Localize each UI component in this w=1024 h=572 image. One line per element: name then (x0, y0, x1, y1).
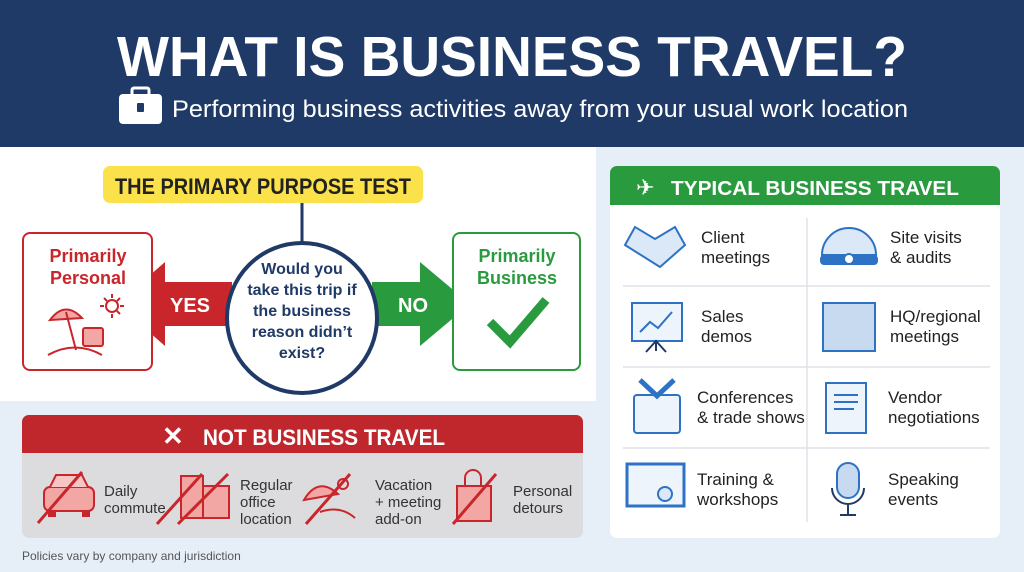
arrow: yes: YES (170, 295, 210, 317)
item: sales demos: Sales (701, 307, 744, 326)
item: training: workshops (696, 490, 778, 509)
subtitle: Performing business activities away from your usual work location (172, 96, 908, 123)
heading: primary purpose test: THE PRIMARY PURPOSE TEST (115, 174, 411, 199)
item: conferences: & trade shows (697, 408, 805, 427)
item: vacation add-on: Vacation (375, 477, 432, 494)
item: sales demos (632, 303, 752, 352)
item: regular office (157, 474, 293, 528)
question circle: exist? (279, 345, 325, 362)
item: vacation add-on: + meeting (375, 494, 441, 511)
item: personal detours (453, 470, 572, 524)
box: primarily business: Primarily (478, 246, 556, 266)
panel: not business travel (22, 415, 583, 538)
item: site visits: & audits (890, 248, 951, 267)
item: training (627, 464, 778, 509)
item: regular office: Regular (240, 477, 293, 494)
footnote: Policies vary by company and jurisdiction (22, 549, 241, 563)
item: vendor negotiations (826, 383, 980, 433)
header banner (0, 0, 1024, 147)
item: site visits (820, 228, 962, 267)
item: conferences (634, 380, 805, 433)
title: WHAT IS BUSINESS TRAVEL? (117, 25, 907, 89)
item: speaking events: Speaking (888, 470, 959, 489)
item: client meetings: meetings (701, 248, 770, 267)
item: hq meetings (823, 303, 981, 351)
box: primarily business: Business (477, 268, 557, 288)
item: sales demos: demos (701, 327, 752, 346)
question circle: reason didn’t (252, 324, 353, 341)
item: vendor negotiations: Vendor (888, 388, 942, 407)
heading: typical business travel: TYPICAL BUSINESS TRAVEL (671, 178, 959, 200)
item: client meetings (625, 227, 770, 267)
heading: typical business travel (610, 166, 1000, 205)
box: primarily personal: Primarily (49, 246, 127, 266)
item: personal detours: Personal (513, 483, 572, 500)
arrow: no (372, 262, 470, 346)
item: vacation add-on (304, 474, 441, 528)
question circle: the business (253, 303, 351, 320)
item: daily commute: commute (104, 500, 166, 517)
arrow: yes (117, 262, 232, 346)
item: vacation add-on: add-on (375, 511, 422, 528)
heading: typical business travel: ✈ (636, 175, 654, 200)
question circle: take this trip if (247, 282, 357, 299)
question circle (227, 243, 377, 393)
item: client meetings: Client (701, 228, 745, 247)
item: speaking events: events (888, 490, 938, 509)
item: daily commute: Daily (104, 483, 138, 500)
box: primarily personal: Personal (50, 268, 126, 288)
item: regular office: office (240, 494, 276, 511)
box: primarily business (453, 233, 580, 370)
heading: primary purpose test (103, 166, 423, 203)
question circle: Would you (261, 261, 343, 278)
item: regular office: location (240, 511, 292, 528)
heading: not business travel: ✕ (162, 421, 184, 451)
item: hq meetings: meetings (890, 327, 959, 346)
box: primarily personal (23, 233, 152, 370)
heading: not business travel (22, 415, 583, 453)
heading: not business travel: NOT BUSINESS TRAVEL (203, 425, 445, 450)
item: training: Training & (697, 470, 775, 489)
item: hq meetings: HQ/regional (890, 307, 981, 326)
icon: check (490, 300, 546, 342)
icon: briefcase (119, 88, 162, 124)
item: personal detours: detours (513, 500, 563, 517)
icon: beach (48, 294, 124, 355)
item: site visits: Site visits (890, 228, 962, 247)
item: daily commute (38, 472, 166, 523)
panel: typical business travel (610, 166, 1000, 538)
arrow: no: NO (398, 295, 428, 317)
item: vendor negotiations: negotiations (888, 408, 980, 427)
panel: primary purpose test (0, 147, 596, 401)
item: speaking events (832, 463, 959, 515)
item: conferences: Conferences (697, 388, 793, 407)
